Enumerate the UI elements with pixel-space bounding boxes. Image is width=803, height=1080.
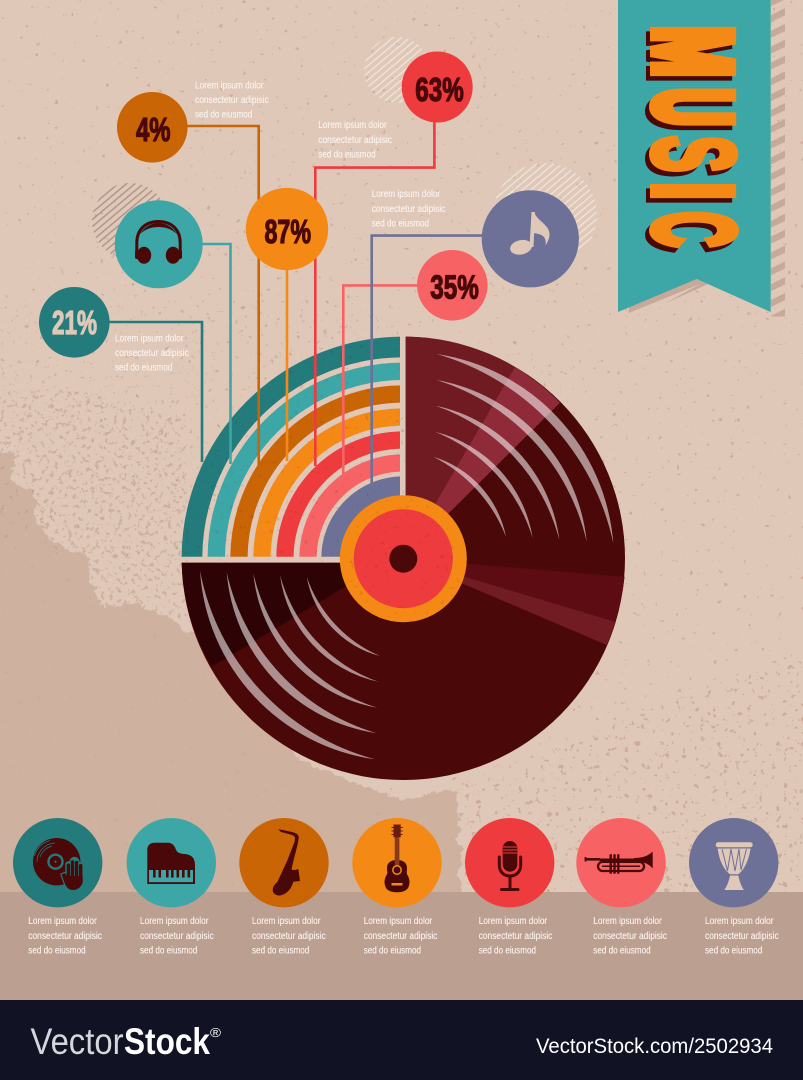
text block: right: consectetur adipisic <box>372 204 445 215</box>
ribbon banner <box>618 0 785 316</box>
title shadow: C <box>626 216 754 252</box>
text block: centre: Lorem ipsum dolor <box>318 120 387 131</box>
caption 7: consectetur adipisic <box>705 931 779 942</box>
icon: saxophone <box>239 818 329 907</box>
text block: centre <box>318 120 392 161</box>
record label <box>339 495 468 623</box>
drum rim <box>716 842 753 847</box>
text block: right <box>372 189 445 230</box>
bubble: 21% <box>39 287 110 358</box>
text block: left: consectetur adipisic <box>115 348 189 359</box>
brand logo: VectorStock <box>30 1021 221 1062</box>
bubble: 63% <box>402 52 473 122</box>
caption 1: consectetur adipisic <box>28 931 102 942</box>
caption 2 <box>140 916 214 957</box>
caption 4: sed do eiusmod <box>364 946 421 957</box>
DJ grooves <box>34 840 55 862</box>
text block: top left: Lorem ipsum dolor <box>195 80 264 92</box>
caption 1 <box>28 916 102 957</box>
title shadow <box>624 31 754 252</box>
DJ record <box>33 838 80 885</box>
caption 3: consectetur adipisic <box>252 931 326 942</box>
title face <box>628 26 758 247</box>
caption 5: sed do eiusmod <box>479 946 536 957</box>
trumpet leadpipe <box>586 858 640 861</box>
DJ hand outline <box>62 858 83 890</box>
trumpet bell <box>634 852 653 868</box>
connector 63% <box>315 118 434 466</box>
title face: I <box>632 183 753 199</box>
microphone grille <box>503 847 517 853</box>
hatched circle: top <box>364 37 430 103</box>
ribbon body <box>618 0 771 312</box>
title shadow: I <box>628 188 749 203</box>
text block: top left: sed do eiusmod <box>195 110 252 121</box>
label centre <box>354 509 453 608</box>
connector 35% <box>343 285 420 474</box>
vinyl shadow wedge lower-left <box>182 563 406 667</box>
connector lines <box>105 118 486 484</box>
text block: right: sed do eiusmod <box>372 219 429 230</box>
caption 3 <box>252 916 326 957</box>
caption 3: sed do eiusmod <box>252 946 309 957</box>
spindle hole <box>389 545 417 573</box>
icon: headphones <box>135 222 182 264</box>
text block: right: Lorem ipsum dolor <box>372 189 441 200</box>
caption 4: Lorem ipsum dolor <box>364 916 433 927</box>
vinyl wedge highlight top <box>403 367 560 558</box>
background: left grunge patch <box>0 388 190 622</box>
image id link text: VectorStock.com/2502934 <box>536 1035 773 1058</box>
caption 6: consectetur adipisic <box>593 931 667 942</box>
title: MUSIC <box>624 26 758 252</box>
vinyl wedge right <box>403 558 625 622</box>
caption 5: Lorem ipsum dolor <box>479 916 548 927</box>
connector headphones <box>198 244 230 464</box>
text block: top left <box>195 80 269 121</box>
groove highlights top-right <box>433 354 613 543</box>
trumpet mouthpiece <box>584 857 586 862</box>
guitar neck <box>395 825 399 867</box>
caption 1: sed do eiusmod <box>28 946 86 957</box>
drum bowl <box>718 848 750 874</box>
footer band: credit bar <box>0 1000 803 1080</box>
icon: music note <box>509 212 550 257</box>
arc speckle texture <box>180 335 402 559</box>
guitar headstock <box>392 825 403 837</box>
guitar body <box>384 860 410 892</box>
icon: trumpet <box>576 818 666 907</box>
text block: left <box>115 334 189 374</box>
footer band: taupe strip <box>0 892 803 1000</box>
bubble: 4%: 4% <box>136 112 170 149</box>
bubble: 63%: 63% <box>415 72 464 109</box>
icon: djembe drum <box>689 818 778 907</box>
guitar soundhole <box>393 866 401 874</box>
bubble: 87%: 87% <box>264 214 311 251</box>
brand logo: VectorStock: Vector <box>30 1021 124 1062</box>
piano body <box>147 843 195 884</box>
icon: acoustic guitar <box>352 818 442 907</box>
title face: U <box>633 88 754 126</box>
caption 6 <box>593 916 667 957</box>
connector 4% <box>183 126 259 466</box>
vinyl record <box>180 335 625 780</box>
guitar bridge <box>392 883 402 886</box>
percentage arcs <box>182 336 400 557</box>
caption 2: Lorem ipsum dolor <box>140 916 209 927</box>
icon: DJ turntable <box>13 818 102 907</box>
icon: grand piano <box>127 818 216 907</box>
connector 87% <box>286 265 288 461</box>
caption 5: consectetur adipisic <box>479 931 552 942</box>
DJ hand <box>62 860 83 890</box>
caption 2: consectetur adipisic <box>140 931 214 942</box>
icon: microphone <box>465 818 554 907</box>
text block: top left: consectetur adipisic <box>195 95 269 106</box>
groove highlights lower-left <box>200 571 380 759</box>
caption 6: Lorem ipsum dolor <box>593 916 662 927</box>
title shadow: U <box>629 93 750 130</box>
brand logo: VectorStock: ® <box>210 1025 221 1040</box>
ribbon notch shadow <box>629 279 708 313</box>
text block: left: Lorem ipsum dolor <box>115 334 184 344</box>
vinyl wedge top <box>403 337 515 558</box>
microphone capsule <box>503 841 517 872</box>
microphone stand <box>502 876 518 890</box>
drum ropes <box>722 849 746 871</box>
vinyl disc <box>182 337 625 780</box>
text block: centre: sed do eiusmod <box>318 150 376 161</box>
caption 5 <box>479 916 552 957</box>
label speckle <box>339 495 468 623</box>
bubble: headphones <box>115 200 203 288</box>
text block: left: sed do eiusmod <box>115 363 172 374</box>
background: lower-right grunge patch <box>450 640 803 892</box>
title face: M <box>633 26 753 77</box>
bubble: 35% <box>417 250 488 321</box>
title shadow: S <box>624 140 753 177</box>
connector 21% <box>105 322 202 462</box>
label ring <box>340 495 467 622</box>
hatched circle: behind note <box>493 163 597 267</box>
microphone cradle <box>499 857 521 876</box>
title face: C <box>630 212 758 247</box>
caption 4: consectetur adipisic <box>364 931 437 942</box>
connector note <box>372 236 486 484</box>
text block: centre: consectetur adipisic <box>318 135 392 146</box>
caption 3: Lorem ipsum dolor <box>252 916 321 927</box>
caption 7: Lorem ipsum dolor <box>705 916 774 927</box>
background: darker lower wash <box>0 448 461 900</box>
piano black keys <box>153 870 190 878</box>
brand logo: VectorStock: Stock <box>124 1021 210 1062</box>
trumpet valves <box>611 854 618 874</box>
caption 4 <box>364 916 437 957</box>
bubble: 21%: 21% <box>52 305 97 342</box>
DJ spindle <box>54 861 57 863</box>
bubble: 87% <box>246 188 328 270</box>
drum base <box>724 876 744 890</box>
bubble: 4% <box>117 92 188 163</box>
vinyl wedge right light <box>403 558 615 645</box>
trumpet loop <box>598 862 644 871</box>
caption 1: Lorem ipsum dolor <box>28 916 97 927</box>
bubble: 35%: 35% <box>430 270 479 307</box>
caption 7: sed do eiusmod <box>705 946 762 957</box>
title shadow: M <box>629 31 749 81</box>
ribbon stripes shadow <box>771 0 785 316</box>
caption 7 <box>705 916 779 957</box>
hatched circle: behind headphones <box>92 183 168 259</box>
bubble: music note <box>482 190 579 287</box>
caption 6: sed do eiusmod <box>593 946 651 957</box>
piano keys <box>149 870 193 882</box>
caption 2: sed do eiusmod <box>140 946 197 957</box>
DJ label ring <box>48 855 62 869</box>
title face: S <box>628 136 757 172</box>
